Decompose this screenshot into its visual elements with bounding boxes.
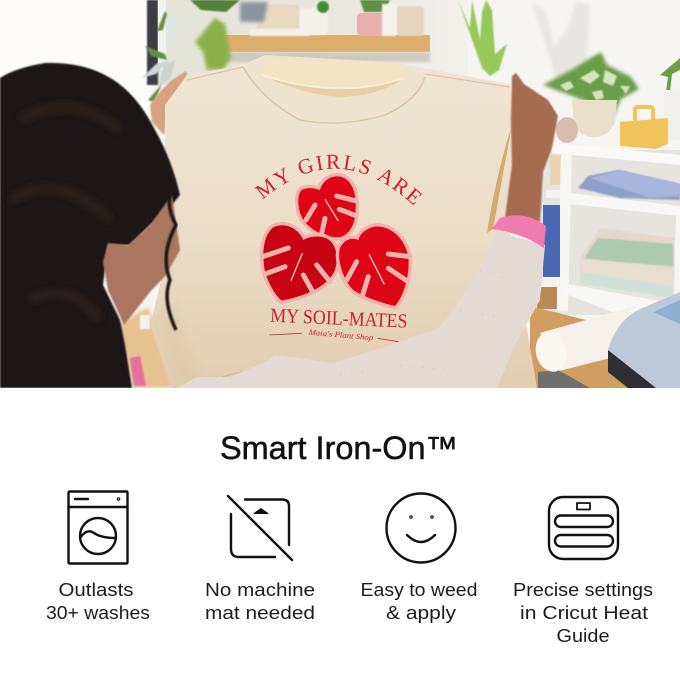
- icon: smiley face: [386, 494, 456, 562]
- potted plant: [543, 52, 639, 143]
- monstera leaf: left: [263, 225, 337, 301]
- feature: outlasts 30+ washes: [46, 492, 150, 623]
- label: mat: No machine: [205, 579, 315, 600]
- yellow caddy: [620, 107, 668, 149]
- label: weed: [360, 579, 478, 623]
- feature: precise settings: [513, 497, 653, 646]
- tall plant by the window: [142, 11, 178, 102]
- collar: [243, 55, 425, 123]
- pink collar of the woman's top: [130, 356, 146, 386]
- room wall: [104, 0, 680, 388]
- shop signature: Maia's Plant Shop: [307, 328, 374, 342]
- sweater sleeve: [177, 215, 546, 388]
- title: Smart Iron-On™: [220, 430, 458, 466]
- right plant and white pot: [660, 58, 680, 92]
- hanging curl: [166, 190, 176, 330]
- label: settings: in Cricut Heat: [520, 602, 648, 623]
- feature: no machine mat needed: [205, 496, 315, 623]
- sweatshirt: [150, 55, 537, 388]
- lower heading: MY SOIL-MATES: [270, 305, 408, 333]
- icon: heat press: [549, 497, 618, 559]
- label: washes: [46, 579, 150, 623]
- icon: crossed-out mat: [228, 496, 292, 560]
- printed design on sweatshirt: [254, 154, 422, 342]
- label: washes: 30+ washes: [46, 602, 150, 623]
- monstera leaf: top: [298, 176, 356, 237]
- icon: washing machine: [68, 492, 128, 564]
- label: settings: [513, 579, 653, 646]
- left hand holding the shoulder: [150, 71, 188, 135]
- arched heading: [263, 169, 409, 202]
- label: settings: Guide: [556, 625, 610, 646]
- paper roll: [531, 307, 632, 375]
- label: weed: Easy to weed: [360, 579, 478, 600]
- printed design on sweatshirt: MY GIRLS ARE: [254, 154, 422, 205]
- pink cuff: [492, 215, 546, 248]
- curly hair: [0, 63, 180, 388]
- label: weed: & apply: [386, 602, 457, 623]
- feature: easy to weed: [360, 494, 478, 623]
- monstera leaf: right: [339, 227, 410, 306]
- white shelving unit: [537, 143, 680, 315]
- face and ear: [103, 195, 180, 325]
- sunlit desk: [530, 308, 628, 388]
- label: mat: mat needed: [205, 602, 315, 623]
- heat press: [608, 292, 680, 388]
- label: mat: [205, 579, 315, 623]
- forearm and right hand: [505, 73, 558, 222]
- window frame: [147, 0, 158, 85]
- label: settings: Precise settings: [513, 579, 653, 600]
- wall shelf with plants and jars: [190, 0, 430, 70]
- label: washes: Outlasts: [58, 579, 134, 600]
- photo: woman holding up a printed sweatshirt: [0, 0, 680, 388]
- green plant at back: [458, 0, 507, 76]
